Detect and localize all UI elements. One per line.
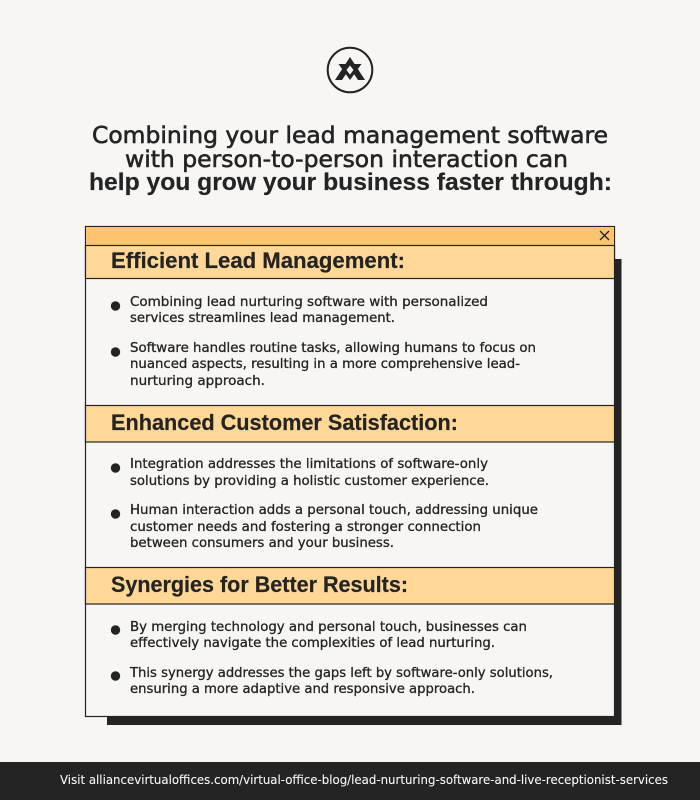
section 2 header: Enhanced Customer Satisfaction: bbox=[111, 410, 458, 435]
section 1 text: nurturing approach. bbox=[130, 374, 265, 389]
section 3 text bbox=[111, 620, 553, 697]
section 2 text: Human interaction adds a personal touch, addressing unique bbox=[130, 503, 538, 518]
title: help you grow your business faster through: bbox=[89, 169, 612, 196]
section 2 text: between consumers and your business. bbox=[130, 536, 394, 551]
section 3 header bbox=[86, 568, 614, 604]
section 1 text: nuanced aspects, resulting in a more comprehensive lead- bbox=[130, 357, 520, 372]
section 1 text: Software handles routine tasks, allowing humans to focus on bbox=[130, 341, 536, 356]
section 3 text: ensuring a more adaptive and responsive approach. bbox=[130, 682, 475, 697]
section 1 header: Efficient Lead Management: bbox=[111, 248, 405, 273]
drop shadow of window bbox=[107, 259, 622, 725]
section 1 header bbox=[86, 246, 614, 278]
title: with person-to-person interaction can bbox=[125, 147, 568, 173]
section 1 text: Combining lead nurturing software with personalized bbox=[130, 295, 488, 310]
section 3 text: By merging technology and personal touch, businesses can bbox=[130, 620, 527, 635]
section 3 text: effectively navigate the complexities of lead nurturing. bbox=[130, 636, 495, 651]
section 2 text: solutions by providing a holistic customer experience. bbox=[130, 474, 489, 489]
section 3 header: Synergies for Better Results: bbox=[111, 572, 408, 597]
window title bar bbox=[86, 227, 614, 245]
section 1 text: services streamlines lead management. bbox=[130, 311, 395, 326]
icon: close bbox=[600, 231, 609, 240]
section 2 text bbox=[111, 457, 538, 551]
title: Combining your lead management software bbox=[92, 123, 608, 149]
icon: logo bbox=[328, 48, 372, 92]
title bbox=[89, 123, 612, 196]
section 2 header bbox=[86, 406, 614, 442]
panel: window bbox=[86, 226, 614, 716]
section 1 text bbox=[111, 295, 536, 389]
section 2 text: Integration addresses the limitations of software-only bbox=[130, 457, 488, 472]
section 3 text: This synergy addresses the gaps left by software-only solutions, bbox=[129, 666, 553, 681]
section 2 text: customer needs and fostering a stronger connection bbox=[130, 520, 481, 535]
footer bar bbox=[0, 762, 700, 800]
